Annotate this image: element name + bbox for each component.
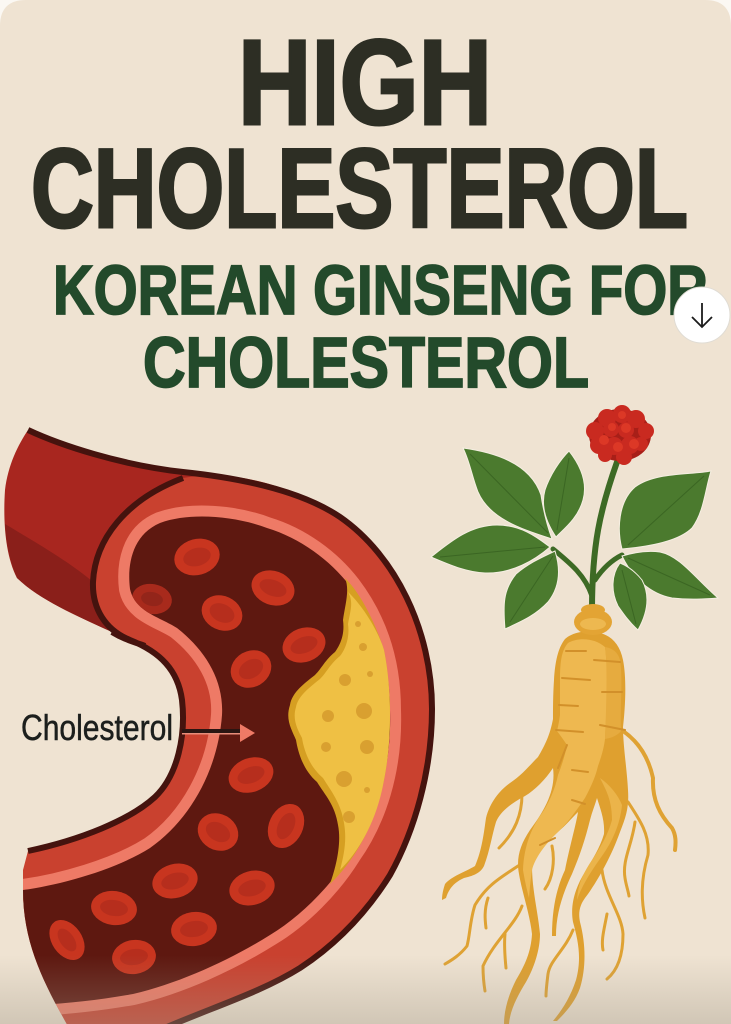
cholesterol arrow <box>182 724 255 742</box>
artery wall <box>23 476 432 1024</box>
title: high cholesterol: HIGH <box>238 14 492 150</box>
ginseng plant <box>431 405 718 1024</box>
ginseng leaves <box>431 448 718 630</box>
ginseng right root highlight <box>577 778 622 900</box>
ginseng berries <box>586 405 654 465</box>
artery back tube <box>4 430 260 632</box>
artery illustration <box>0 430 432 1024</box>
scroll down button <box>674 287 730 343</box>
ginseng neck <box>574 604 612 635</box>
title: high cholesterol <box>31 14 688 251</box>
cholesterol label: Cholesterol <box>21 707 173 748</box>
cholesterol plaque <box>288 578 390 884</box>
ginseng right shade band <box>605 647 621 739</box>
ginseng root silhouette <box>442 631 628 1024</box>
subtitle: korean ginseng for cholesterol: CHOLESTEROL <box>143 324 589 403</box>
artery outer outline <box>28 430 432 1024</box>
red blood cells <box>42 534 330 977</box>
leaf veins <box>440 454 710 624</box>
artery inner lining and lumen <box>0 517 390 1006</box>
ginseng wrinkles <box>540 651 625 845</box>
thin rootlets <box>445 731 676 996</box>
ginseng stems <box>553 462 622 610</box>
ginseng body highlight <box>523 639 607 898</box>
subtitle: korean ginseng for cholesterol <box>53 251 708 403</box>
bottom fade <box>0 955 731 1024</box>
